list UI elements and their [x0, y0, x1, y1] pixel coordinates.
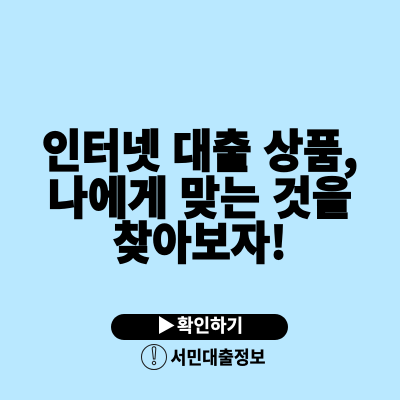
brand logo: [142, 344, 266, 370]
title: 나에게 맞는 것을: [48, 162, 352, 227]
title: 인터넷 대출 상품,: [42, 115, 358, 180]
title: 찾아보자!: [113, 207, 287, 272]
title: [42, 115, 358, 272]
icon: play triangle: [159, 316, 174, 334]
button: 확인하기: [111, 312, 288, 340]
icon: exclamation circle: [142, 344, 166, 370]
button: 확인하기: 확인하기: [177, 312, 243, 338]
brand name: 서민대출정보: [170, 344, 266, 370]
